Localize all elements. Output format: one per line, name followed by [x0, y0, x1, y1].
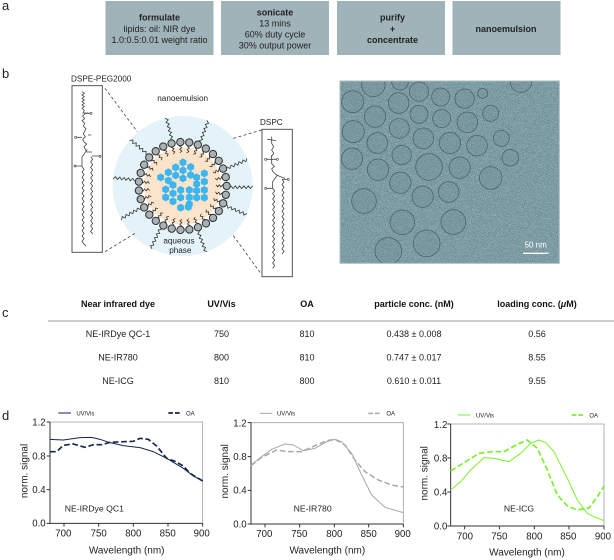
row: NE-ICG: 800 [299, 376, 315, 386]
structure box: DSPE-PEG2000 [72, 86, 102, 252]
row: NE-IR780: 800 [214, 352, 229, 362]
x axis values [256, 529, 411, 540]
step: sonicate: 30% output power [239, 40, 311, 50]
leader lines [105, 88, 262, 272]
label: aqueous phase: aqueous [163, 236, 195, 245]
panel label: d: d [2, 408, 9, 423]
chart: NE-IR780 [220, 412, 411, 557]
step: formulate: 1.0:0.5:0.01 weight ratio [111, 35, 208, 45]
scale bar: 50 nm [525, 241, 547, 250]
UV/Vis curve [451, 440, 604, 521]
panel label: b: b [2, 66, 9, 81]
y axis values [434, 420, 448, 532]
OA curve [451, 440, 604, 510]
y axis values: 1.2 [434, 420, 447, 431]
plot frame and ticks [248, 423, 403, 527]
plot frame and ticks [47, 422, 203, 527]
y axis values: 0.0 [233, 519, 247, 530]
chart: NE-ICG [420, 414, 611, 559]
legend: OA [589, 414, 598, 420]
y axis values: 0.8 [434, 454, 447, 465]
nanoemulsion droplets [341, 71, 532, 264]
y axis values [233, 419, 247, 530]
x axis values: 900 [194, 529, 210, 540]
plot frame and ticks [447, 424, 604, 529]
OA curve [251, 439, 403, 487]
row: NE-IR780: 8.55 [528, 352, 546, 362]
row: NE-IR780 [98, 352, 546, 362]
step: sonicate: 60% duty cycle [245, 30, 305, 40]
x axis values: 750 [491, 531, 507, 542]
oil core [144, 147, 221, 225]
panel label: c: c [2, 305, 9, 320]
UV/Vis curve [251, 439, 403, 513]
row: NE-ICG [102, 376, 546, 386]
x axis values: 900 [395, 529, 411, 540]
table header: UV/Vis [207, 299, 236, 309]
aqueous phase circle [113, 116, 253, 256]
panel a: process flow [106, 1, 560, 55]
lipid shell background [141, 144, 225, 228]
y axis values: 0.8 [32, 451, 46, 462]
legend: OA [186, 411, 195, 417]
label: DSPE-PEG2000: DSPE-PEG2000 [71, 74, 132, 83]
legend [58, 411, 195, 417]
row: NE-IR780: 0.747 ± 0.017 [387, 352, 441, 362]
step: purify and concentrate [337, 1, 445, 55]
x axis values: 800 [526, 531, 542, 542]
x axis values: 850 [560, 531, 576, 542]
x axis values: 750 [91, 529, 107, 540]
row: NE-IRDye QC-1: 750 [214, 329, 229, 339]
y axis values: 1.2 [233, 419, 247, 430]
UV/Vis curve [50, 437, 203, 481]
row: NE-ICG: 9.55 [528, 376, 546, 386]
table header: Near infrared dye [81, 299, 155, 309]
x axis title: Wavelength (nm) [89, 545, 164, 556]
step: sonicate [221, 1, 329, 55]
step: sonicate: sonicate [257, 8, 293, 18]
label: aqueous phase: phase [169, 246, 192, 255]
step: purify and concentrate: concentrate [367, 35, 418, 45]
row: NE-IR780: NE-IR780 [98, 352, 138, 362]
table header [81, 299, 577, 309]
micrograph border [340, 81, 559, 263]
legend: UV/Vis [76, 411, 95, 417]
table header: loading conc. (μM) [497, 299, 577, 309]
row: NE-IRDye QC-1 [86, 329, 546, 339]
table header: OA [300, 299, 314, 309]
x axis title: Wavelength (nm) [290, 546, 365, 557]
step: purify and concentrate: + [390, 24, 395, 34]
step: formulate: lipids: oil: NIR dye [123, 24, 196, 34]
y axis values: 0.8 [233, 452, 247, 463]
x axis values: 800 [125, 529, 141, 540]
step: purify and concentrate: purify [380, 12, 405, 22]
label: nanoemulsion: nanoemulsion [157, 94, 208, 103]
y axis title: norm. signal [220, 444, 231, 499]
x axis values [457, 531, 611, 542]
x axis values [55, 529, 210, 540]
legend [260, 412, 395, 418]
y axis values: 0.4 [32, 485, 46, 496]
x axis values: 700 [55, 529, 71, 540]
x axis title: Wavelength (nm) [489, 548, 565, 559]
y axis values: 1.2 [32, 417, 46, 428]
y axis values [32, 417, 46, 530]
x axis values: 750 [291, 529, 307, 540]
legend: UV/Vis [476, 414, 494, 420]
scale bar [523, 241, 548, 254]
row: NE-ICG: 810 [214, 376, 229, 386]
structure box: DSPC [262, 129, 292, 277]
step: nanoemulsion: nanoemulsion [475, 24, 537, 34]
y axis values: 0.4 [434, 488, 448, 499]
row: NE-ICG: 0.610 ± 0.011 [387, 376, 441, 386]
y axis title: norm. signal [420, 446, 431, 501]
x axis values: 800 [326, 529, 342, 540]
dye molecules [157, 158, 208, 212]
legend [458, 414, 598, 420]
step: sonicate: 13 mins [259, 18, 291, 28]
x axis values: 900 [595, 531, 611, 542]
chart name: NE-IR780 [294, 504, 332, 514]
step: formulate: formulate [139, 12, 180, 22]
table header: particle conc. (nM) [374, 299, 454, 309]
row: NE-IRDye QC-1: 810 [299, 329, 315, 339]
table of dye properties [48, 299, 614, 386]
row: NE-IR780: 810 [299, 352, 315, 362]
label: DSPC: DSPC [260, 118, 283, 127]
lipid monolayer [113, 118, 253, 253]
y axis values: 0.4 [233, 486, 247, 497]
x axis values: 850 [361, 529, 377, 540]
row: NE-IRDye QC-1: NE-IRDye QC-1 [86, 329, 150, 339]
x axis values: 700 [256, 529, 272, 540]
y axis values: 0.0 [32, 519, 46, 530]
row: NE-ICG: NE-ICG [102, 376, 134, 386]
row: NE-IRDye QC-1: 0.438 ± 0.008 [387, 329, 441, 339]
legend: OA [386, 412, 395, 418]
y axis title: norm. signal [19, 444, 30, 498]
row: NE-IRDye QC-1: 0.56 [528, 329, 546, 339]
chart name: NE-IRDye QC1 [65, 504, 124, 514]
legend: UV/Vis [277, 412, 295, 418]
x axis values: 850 [160, 529, 176, 540]
cryo-EM micrograph [340, 71, 559, 264]
chart name: NE-ICG [504, 504, 534, 514]
step: formulate [106, 1, 214, 55]
nanoemulsion diagram [71, 74, 292, 277]
OA curve [50, 438, 203, 481]
y axis values: 0.0 [434, 521, 447, 532]
micrograph background [340, 81, 559, 263]
step: nanoemulsion [452, 1, 560, 55]
x axis values: 700 [457, 531, 473, 542]
chart: NE-IRDye QC1 [19, 411, 210, 556]
